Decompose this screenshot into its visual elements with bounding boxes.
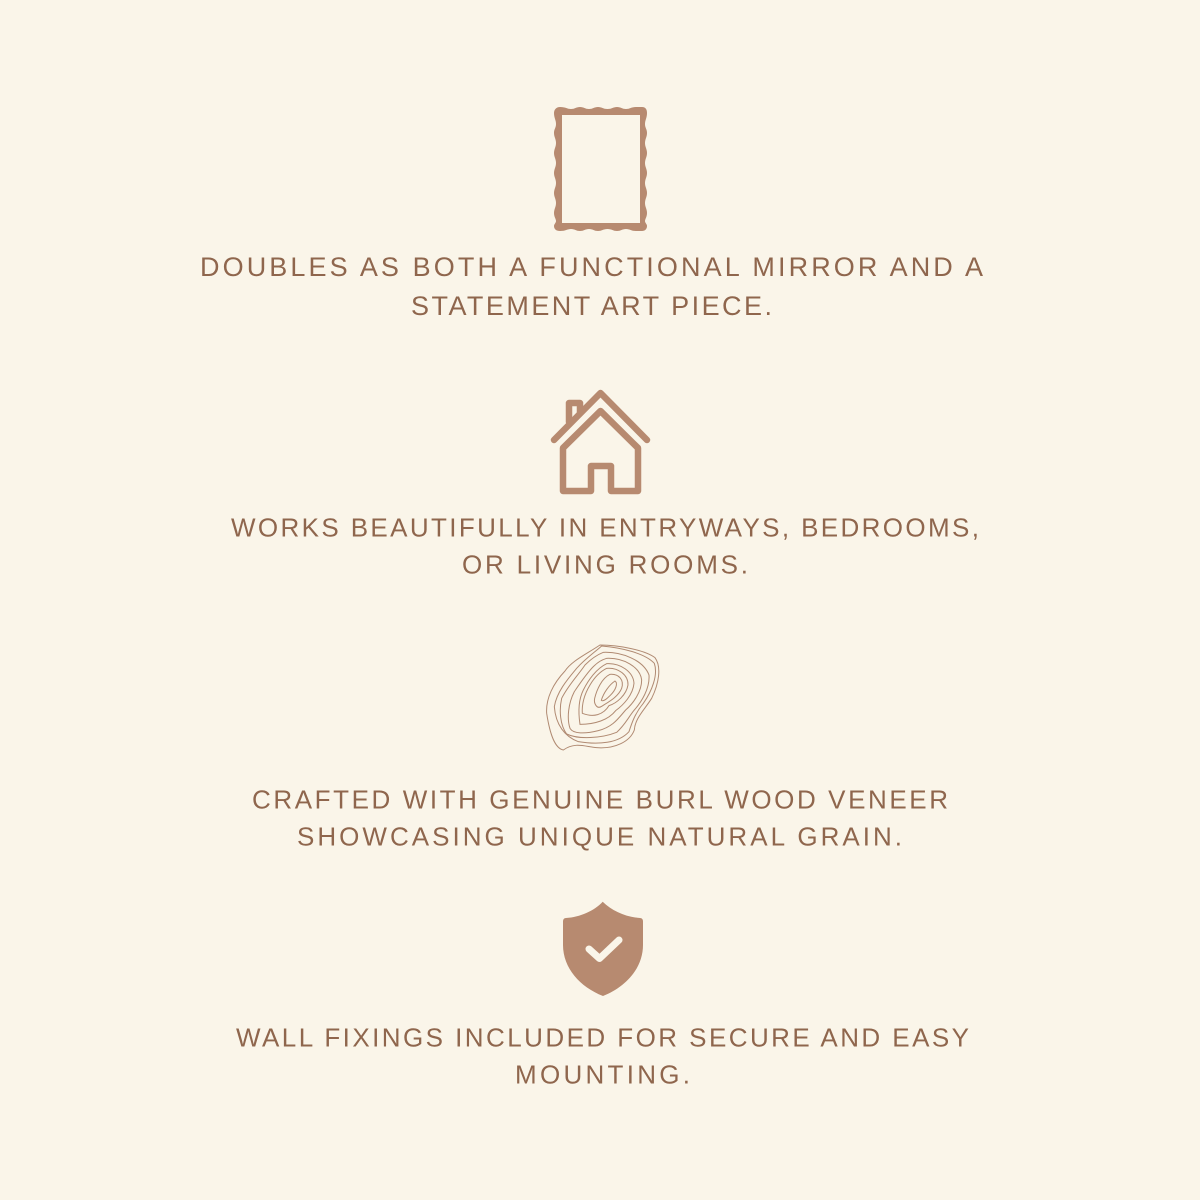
icon: shield with check (563, 902, 643, 996)
icon: burl wood grain rings (547, 645, 659, 750)
text: mirror statement (200, 252, 983, 321)
text: rooms statement: WORKS BEAUTIFULLY IN ENTRYWAYS, BEDROOMS, (231, 512, 979, 542)
text: burl wood statement: SHOWCASING UNIQUE NATURAL GRAIN. (297, 822, 902, 852)
text: rooms statement (231, 512, 979, 580)
text: rooms statement: OR LIVING ROOMS. (462, 550, 748, 580)
text: burl wood statement (252, 784, 948, 852)
text: wall fixings statement: WALL FIXINGS INCLUDED FOR SECURE AND EASY (236, 1022, 969, 1052)
icon: wavy mirror frame (554, 107, 647, 231)
text: burl wood statement: CRAFTED WITH GENUINE BURL WOOD VENEER (252, 784, 948, 814)
text: mirror statement: DOUBLES AS BOTH A FUNCTIONAL MIRROR AND A (200, 252, 983, 282)
text: mirror statement: STATEMENT ART PIECE. (411, 291, 772, 321)
text: wall fixings statement (236, 1022, 969, 1090)
text: wall fixings statement: MOUNTING. (515, 1060, 690, 1090)
icon: house (554, 393, 647, 491)
